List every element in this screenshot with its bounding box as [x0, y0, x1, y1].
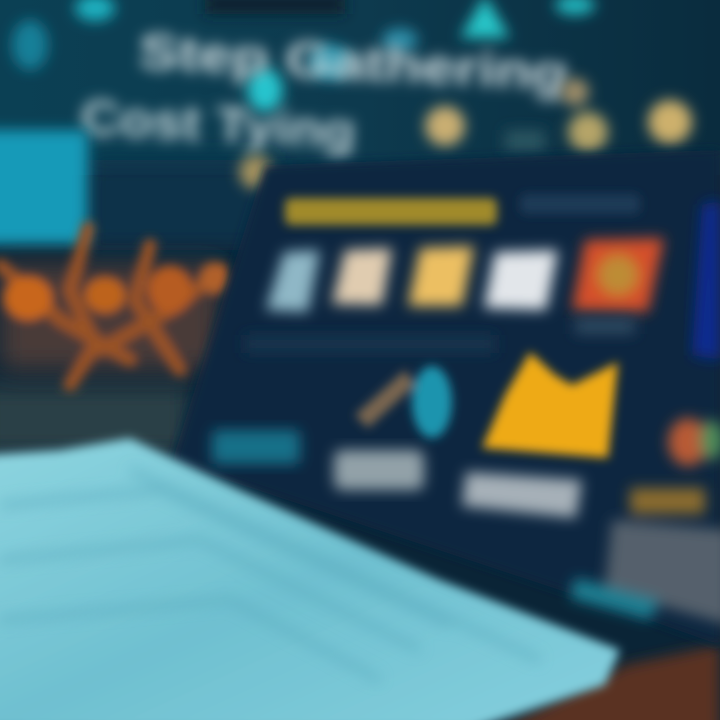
lower right block: [570, 488, 720, 625]
icon: white: [484, 250, 558, 310]
title: [79, 23, 570, 159]
paper sheet: [0, 438, 620, 720]
yellow folder: [482, 352, 618, 458]
icon: gold: [408, 246, 474, 306]
paper lines: [0, 470, 540, 680]
right blue column: [692, 200, 720, 360]
caption bars: [245, 318, 635, 353]
wooden table: [480, 645, 720, 720]
grey label: [334, 450, 424, 490]
icon: red and orange: [572, 238, 664, 312]
title: Cost Tying: [79, 89, 357, 159]
right small icons: [668, 418, 720, 466]
white label: [462, 472, 582, 518]
dark panel: [172, 150, 720, 645]
orange foliage: [0, 228, 230, 385]
top glow icons: [12, 0, 595, 112]
teal label: [212, 430, 300, 464]
golden dots: [239, 78, 692, 189]
teal block: [0, 130, 88, 245]
panel heading: [285, 194, 640, 225]
chart icon: [355, 366, 452, 438]
title: Step Gathering: [137, 23, 570, 101]
icon: cream: [332, 248, 392, 305]
icon: pale blue: [266, 250, 320, 312]
icon row: [266, 238, 664, 312]
